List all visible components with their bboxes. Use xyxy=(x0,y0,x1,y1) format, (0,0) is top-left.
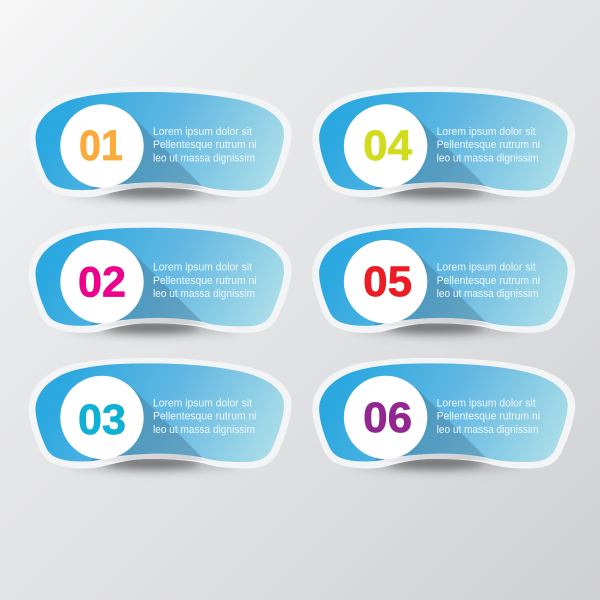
panel: item 06 xyxy=(312,358,575,471)
text block 03 xyxy=(153,397,256,436)
panel: item 01 xyxy=(29,86,292,200)
number 04: 04 xyxy=(363,122,412,170)
text block 02: leo ut massa dignissim xyxy=(153,288,255,300)
panel: item 03 xyxy=(29,358,292,471)
text block 02: Pellentesque rutrum ni xyxy=(153,275,256,287)
panel: item 05 xyxy=(312,222,575,336)
number 03: 03 xyxy=(78,396,126,444)
text block 02: Lorem ipsum dolor sit xyxy=(153,262,252,274)
text block 04 xyxy=(437,126,540,164)
text block 06 xyxy=(437,397,540,436)
text block 06: Pellentesque rutrum ni xyxy=(437,411,540,423)
text block 04: Lorem ipsum dolor sit xyxy=(437,126,536,138)
text block 06: leo ut massa dignissim xyxy=(437,424,539,436)
text block 02 xyxy=(153,262,256,300)
text block 05 xyxy=(437,262,540,300)
text block 03: leo ut massa dignissim xyxy=(153,424,255,436)
text block 01: Pellentesque rutrum ni xyxy=(153,139,256,151)
number 06: 06 xyxy=(363,394,412,442)
text block 01: Lorem ipsum dolor sit xyxy=(153,126,252,138)
panel: item 02 xyxy=(29,222,292,336)
text block 05: Lorem ipsum dolor sit xyxy=(437,262,536,274)
text block 03: Lorem ipsum dolor sit xyxy=(153,397,252,409)
text block 04: Pellentesque rutrum ni xyxy=(437,139,540,151)
number 01: 01 xyxy=(79,122,123,170)
text block 03: Pellentesque rutrum ni xyxy=(153,411,256,423)
number 02: 02 xyxy=(78,258,126,306)
text block 04: leo ut massa dignissim xyxy=(437,152,539,164)
text block 06: Lorem ipsum dolor sit xyxy=(437,397,536,409)
number 05: 05 xyxy=(363,258,412,306)
text block 01 xyxy=(153,126,256,164)
text block 01: leo ut massa dignissim xyxy=(153,152,255,164)
panel: item 04 xyxy=(312,86,575,200)
text block 05: leo ut massa dignissim xyxy=(437,288,539,300)
text block 05: Pellentesque rutrum ni xyxy=(437,275,540,287)
